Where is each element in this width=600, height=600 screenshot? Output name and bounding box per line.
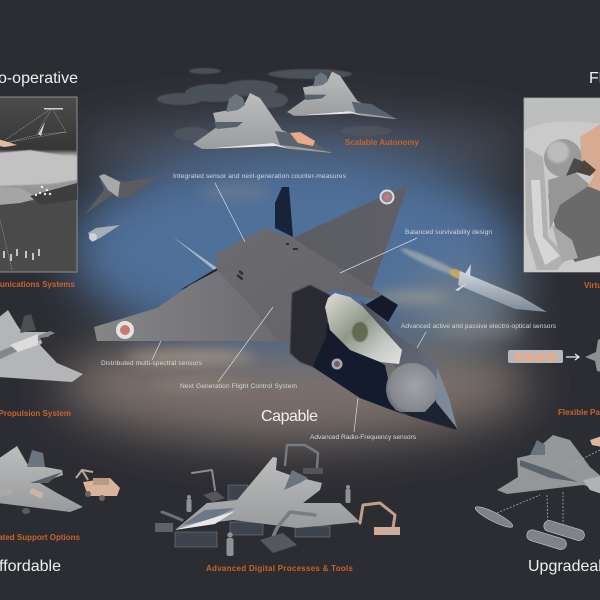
clouds behind autonomy jets (157, 68, 392, 141)
callout: radio-frequency sensors: Advanced Radio-Frequency sensors (310, 434, 417, 441)
dashed attachment lines (497, 450, 600, 528)
robot arm: left (162, 512, 182, 520)
support jet (0, 446, 83, 514)
panel: flexible payloads (508, 338, 600, 417)
callout: flight control: Next Generation Flight Control System (180, 383, 298, 390)
heading: scalable autonomy: Scalable Autonomy (345, 138, 419, 147)
robot arm: orange (360, 503, 395, 528)
robot arms (162, 445, 395, 537)
arrow to jet (566, 354, 579, 360)
upper fuselage (217, 228, 397, 345)
canopy (325, 293, 402, 364)
virtual cockpit illustration (524, 98, 600, 272)
robot arm: top right (285, 445, 318, 468)
intake (290, 285, 330, 367)
left canted fin (173, 237, 220, 274)
workers (186, 485, 350, 556)
panel: upgradeable (473, 435, 600, 575)
propulsion jet with exposed engine (0, 310, 83, 382)
orange highlight on canopy (290, 132, 315, 146)
heading: capable: Capable (261, 408, 318, 425)
missile with plume (399, 245, 547, 312)
panel: co-operative heading and photo (0, 70, 78, 289)
callouts on main jet (101, 173, 557, 441)
tail fin (275, 187, 293, 237)
left wing with roundel (94, 268, 295, 341)
upgrade jet (497, 435, 600, 494)
navy underside (300, 320, 455, 430)
upper nose (360, 300, 457, 430)
panel: propulsion (0, 310, 83, 418)
panel: scalable autonomy (157, 68, 419, 153)
nose cone (400, 382, 457, 430)
callout: electro-optical sensors: Advanced active and passive electro-optical sensors (401, 323, 557, 330)
callout: multi-spectral sensors: Distributed multi-spectral sensors (101, 360, 203, 367)
lead autonomy jet (193, 93, 332, 153)
main fighter jet (94, 185, 457, 430)
right wing with roundel (293, 185, 408, 288)
small delta jet (85, 174, 160, 214)
communications scene photo (0, 97, 77, 272)
payload capsule (508, 350, 563, 363)
robot arm: top left (192, 470, 215, 490)
radome (386, 363, 438, 415)
small pod missile (88, 225, 120, 242)
dark rear intake (365, 295, 398, 322)
robot bases (155, 468, 400, 553)
robot arm: centre (273, 512, 315, 537)
factory platform (175, 485, 330, 547)
panel: support options (0, 446, 120, 575)
callout: integrated sensor: Integrated sensor and next-generation counter-measures (173, 173, 347, 180)
payload pods (473, 503, 586, 551)
digital jet (175, 457, 360, 530)
payload jet silhouette (585, 338, 600, 372)
caption: digital processes: Advanced Digital Processes & Tools (206, 564, 354, 573)
panel: digital processes (155, 445, 400, 573)
peach lead aircraft (0, 139, 17, 147)
leader lines (152, 183, 426, 432)
satellite (44, 108, 63, 110)
callout: balanced survivability: Balanced survivability design (405, 229, 492, 236)
support robot vehicle (76, 470, 120, 501)
panel: flight deck heading and cockpit (524, 70, 600, 290)
wingman jet (287, 72, 397, 119)
